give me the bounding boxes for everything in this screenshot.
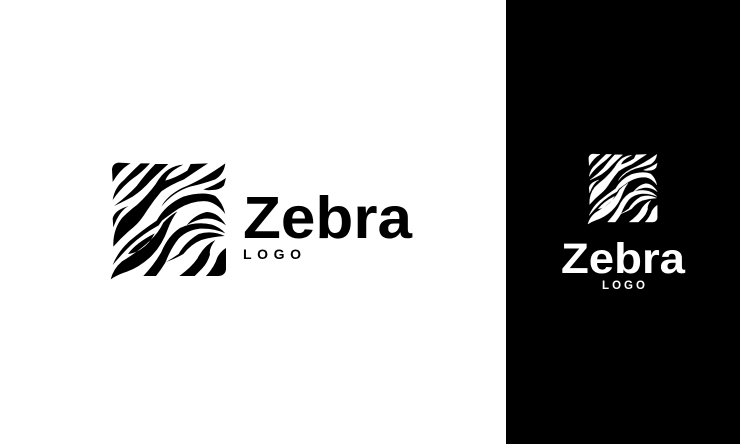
background: black panel	[506, 0, 740, 444]
tagline: LOGO, white: LOGO	[602, 280, 645, 292]
wordmark: Zebra, white: Zebra	[561, 235, 686, 283]
tagline: LOGO, black: LOGO	[243, 246, 301, 262]
background: white panel	[0, 0, 506, 444]
icon: zebra stripes square, white	[588, 154, 657, 224]
wordmark: Zebra, black: Zebra	[243, 185, 413, 251]
icon: zebra stripes square, black	[111, 163, 226, 279]
